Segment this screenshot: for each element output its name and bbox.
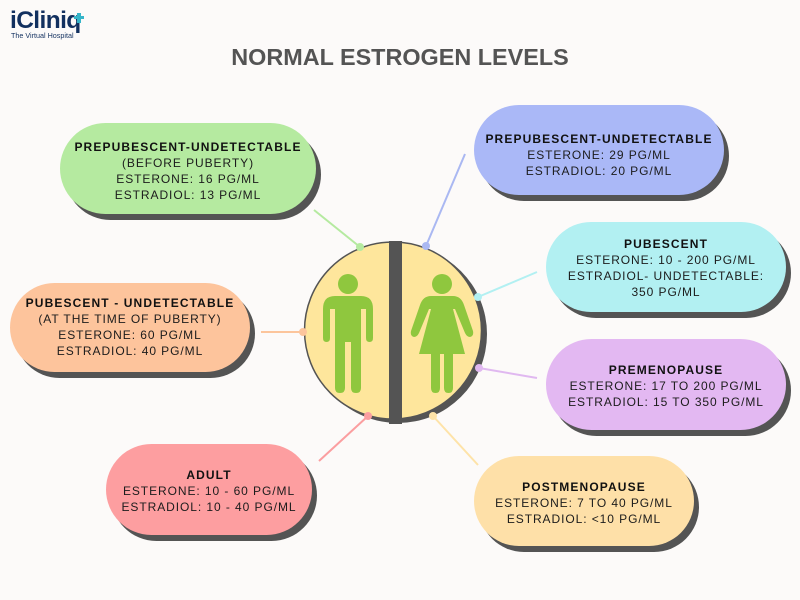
logo: The Virtual Hospital [11, 31, 74, 40]
panel: prepubescent female: ESTERONE: 29 PG/ML [527, 148, 671, 162]
panel: pubescent female: ESTRADIOL- UNDETECTABLE: [568, 269, 764, 283]
connector: red [319, 412, 372, 461]
connector: blue [422, 154, 465, 250]
panel: pubescent male: (AT THE TIME OF PUBERTY) [38, 312, 222, 326]
icon: woman [411, 274, 473, 393]
panel: premenopause: ESTERONE: 17 TO 200 PG/ML [570, 378, 762, 392]
connector: purple [475, 364, 537, 378]
panel: premenopause [546, 339, 786, 430]
panel: pubescent female [546, 222, 786, 312]
panel: pubescent female: 350 PG/ML [631, 285, 701, 299]
panel: pubescent male [10, 283, 250, 372]
panel: prepubescent female: PREPUBESCENT-UNDETECTABLE [485, 132, 713, 146]
panel: prepubescent male: (BEFORE PUBERTY) [122, 156, 254, 170]
panel: prepubescent female: ESTRADIOL: 20 PG/ML [526, 164, 672, 178]
panel: postmenopause: ESTRADIOL: <10 PG/ML [507, 512, 661, 526]
panel: prepubescent male [60, 123, 316, 214]
panel: postmenopause: POSTMENOPAUSE [522, 480, 646, 494]
logo: iCliniq [10, 7, 81, 34]
connector: green [314, 210, 364, 251]
panel: pubescent female: ESTERONE: 10 - 200 PG/ML [576, 253, 756, 267]
panel: premenopause: PREMENOPAUSE [609, 362, 723, 376]
panel: prepubescent female [474, 105, 724, 195]
panel: adult: ESTRADIOL: 10 - 40 PG/ML [121, 500, 297, 514]
connector: yellow [429, 412, 478, 465]
panel: pubescent male: PUBESCENT - UNDETECTABLE [26, 296, 234, 310]
title: NORMAL ESTROGEN LEVELS [231, 44, 569, 70]
panel: postmenopause: ESTERONE: 7 TO 40 PG/ML [495, 496, 673, 510]
panel: postmenopause [474, 456, 694, 546]
panel: prepubescent male: PREPUBESCENT-UNDETECTABLE [74, 140, 302, 154]
panel: adult [106, 444, 312, 535]
panel: pubescent male: ESTERONE: 60 PG/ML [58, 328, 202, 342]
panel: pubescent male: ESTRADIOL: 40 PG/ML [57, 344, 203, 358]
medallion [304, 241, 487, 424]
panel: adult: ESTERONE: 10 - 60 PG/ML [123, 484, 295, 498]
connector: orange [261, 328, 307, 336]
panel: prepubescent male: ESTRADIOL: 13 PG/ML [115, 188, 261, 202]
panel: pubescent female: PUBESCENT [624, 237, 708, 251]
panel: premenopause: ESTRADIOL: 15 TO 350 PG/ML [568, 394, 764, 408]
icon: man [323, 274, 373, 393]
panel: adult: ADULT [186, 468, 232, 482]
connector: cyan [474, 272, 537, 301]
panel: prepubescent male: ESTERONE: 16 PG/ML [116, 172, 260, 186]
